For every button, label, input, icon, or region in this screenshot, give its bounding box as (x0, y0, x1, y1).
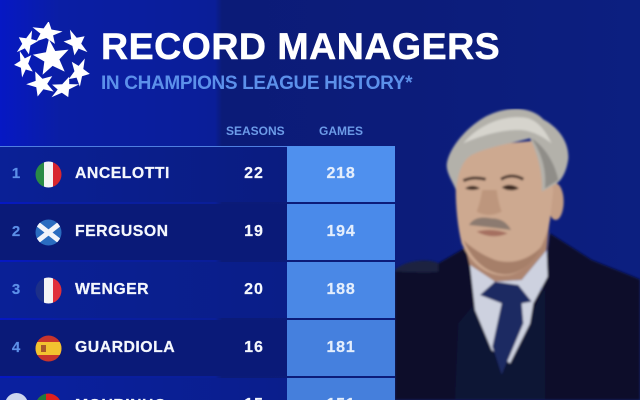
table row 2: 2 (12, 223, 20, 240)
table row 1: ANCELOTTI (75, 165, 170, 182)
neck (463, 217, 550, 282)
flag: France (36, 278, 62, 304)
vest (455, 287, 545, 400)
tie (480, 282, 532, 375)
table row 4: GUARDIOLA (75, 339, 175, 356)
portrait: manager (395, 108, 640, 400)
column heading: seasons: SEASONS (226, 124, 285, 138)
table row 2: 194 (326, 223, 356, 240)
table row 1: 22 (244, 165, 264, 182)
coat (395, 233, 640, 400)
chin shade (463, 240, 542, 274)
flag: Portugal (37, 394, 60, 400)
icon: star ball logo (14, 22, 90, 98)
table row 1 (0, 146, 395, 202)
flag: Scotland (36, 220, 62, 246)
table row 3: 3 (12, 281, 20, 298)
title: RECORD MANAGERS (101, 25, 500, 67)
table row 4: 4 (12, 339, 20, 356)
flag: Italy (36, 162, 62, 188)
table row 5 (0, 378, 395, 400)
rank badge (6, 393, 27, 400)
moustache (469, 218, 511, 230)
table row 1: 218 (326, 165, 356, 182)
face (456, 140, 553, 276)
table row 4: 181 (326, 339, 356, 356)
shirt (470, 250, 548, 363)
subtitle: IN CHAMPIONS LEAGUE HISTORY* (101, 73, 412, 94)
eyes (465, 185, 519, 190)
table row 4 (0, 320, 395, 376)
ear (548, 183, 564, 220)
mouth (477, 230, 508, 236)
hair (447, 109, 568, 192)
table row 1: 1 (12, 165, 20, 182)
table row 4: 16 (244, 339, 264, 356)
table row 2 (0, 204, 395, 260)
brows (463, 176, 523, 181)
column heading: games: GAMES (319, 124, 363, 138)
table row 3: 20 (244, 281, 264, 298)
table row 3: 188 (326, 281, 356, 298)
table row 2: FERGUSON (75, 223, 169, 240)
table row 3: WENGER (75, 281, 149, 298)
table row 3 (0, 262, 395, 318)
flag: Spain (36, 336, 62, 362)
table row 2: 19 (244, 223, 264, 240)
nose shadow (477, 190, 502, 215)
